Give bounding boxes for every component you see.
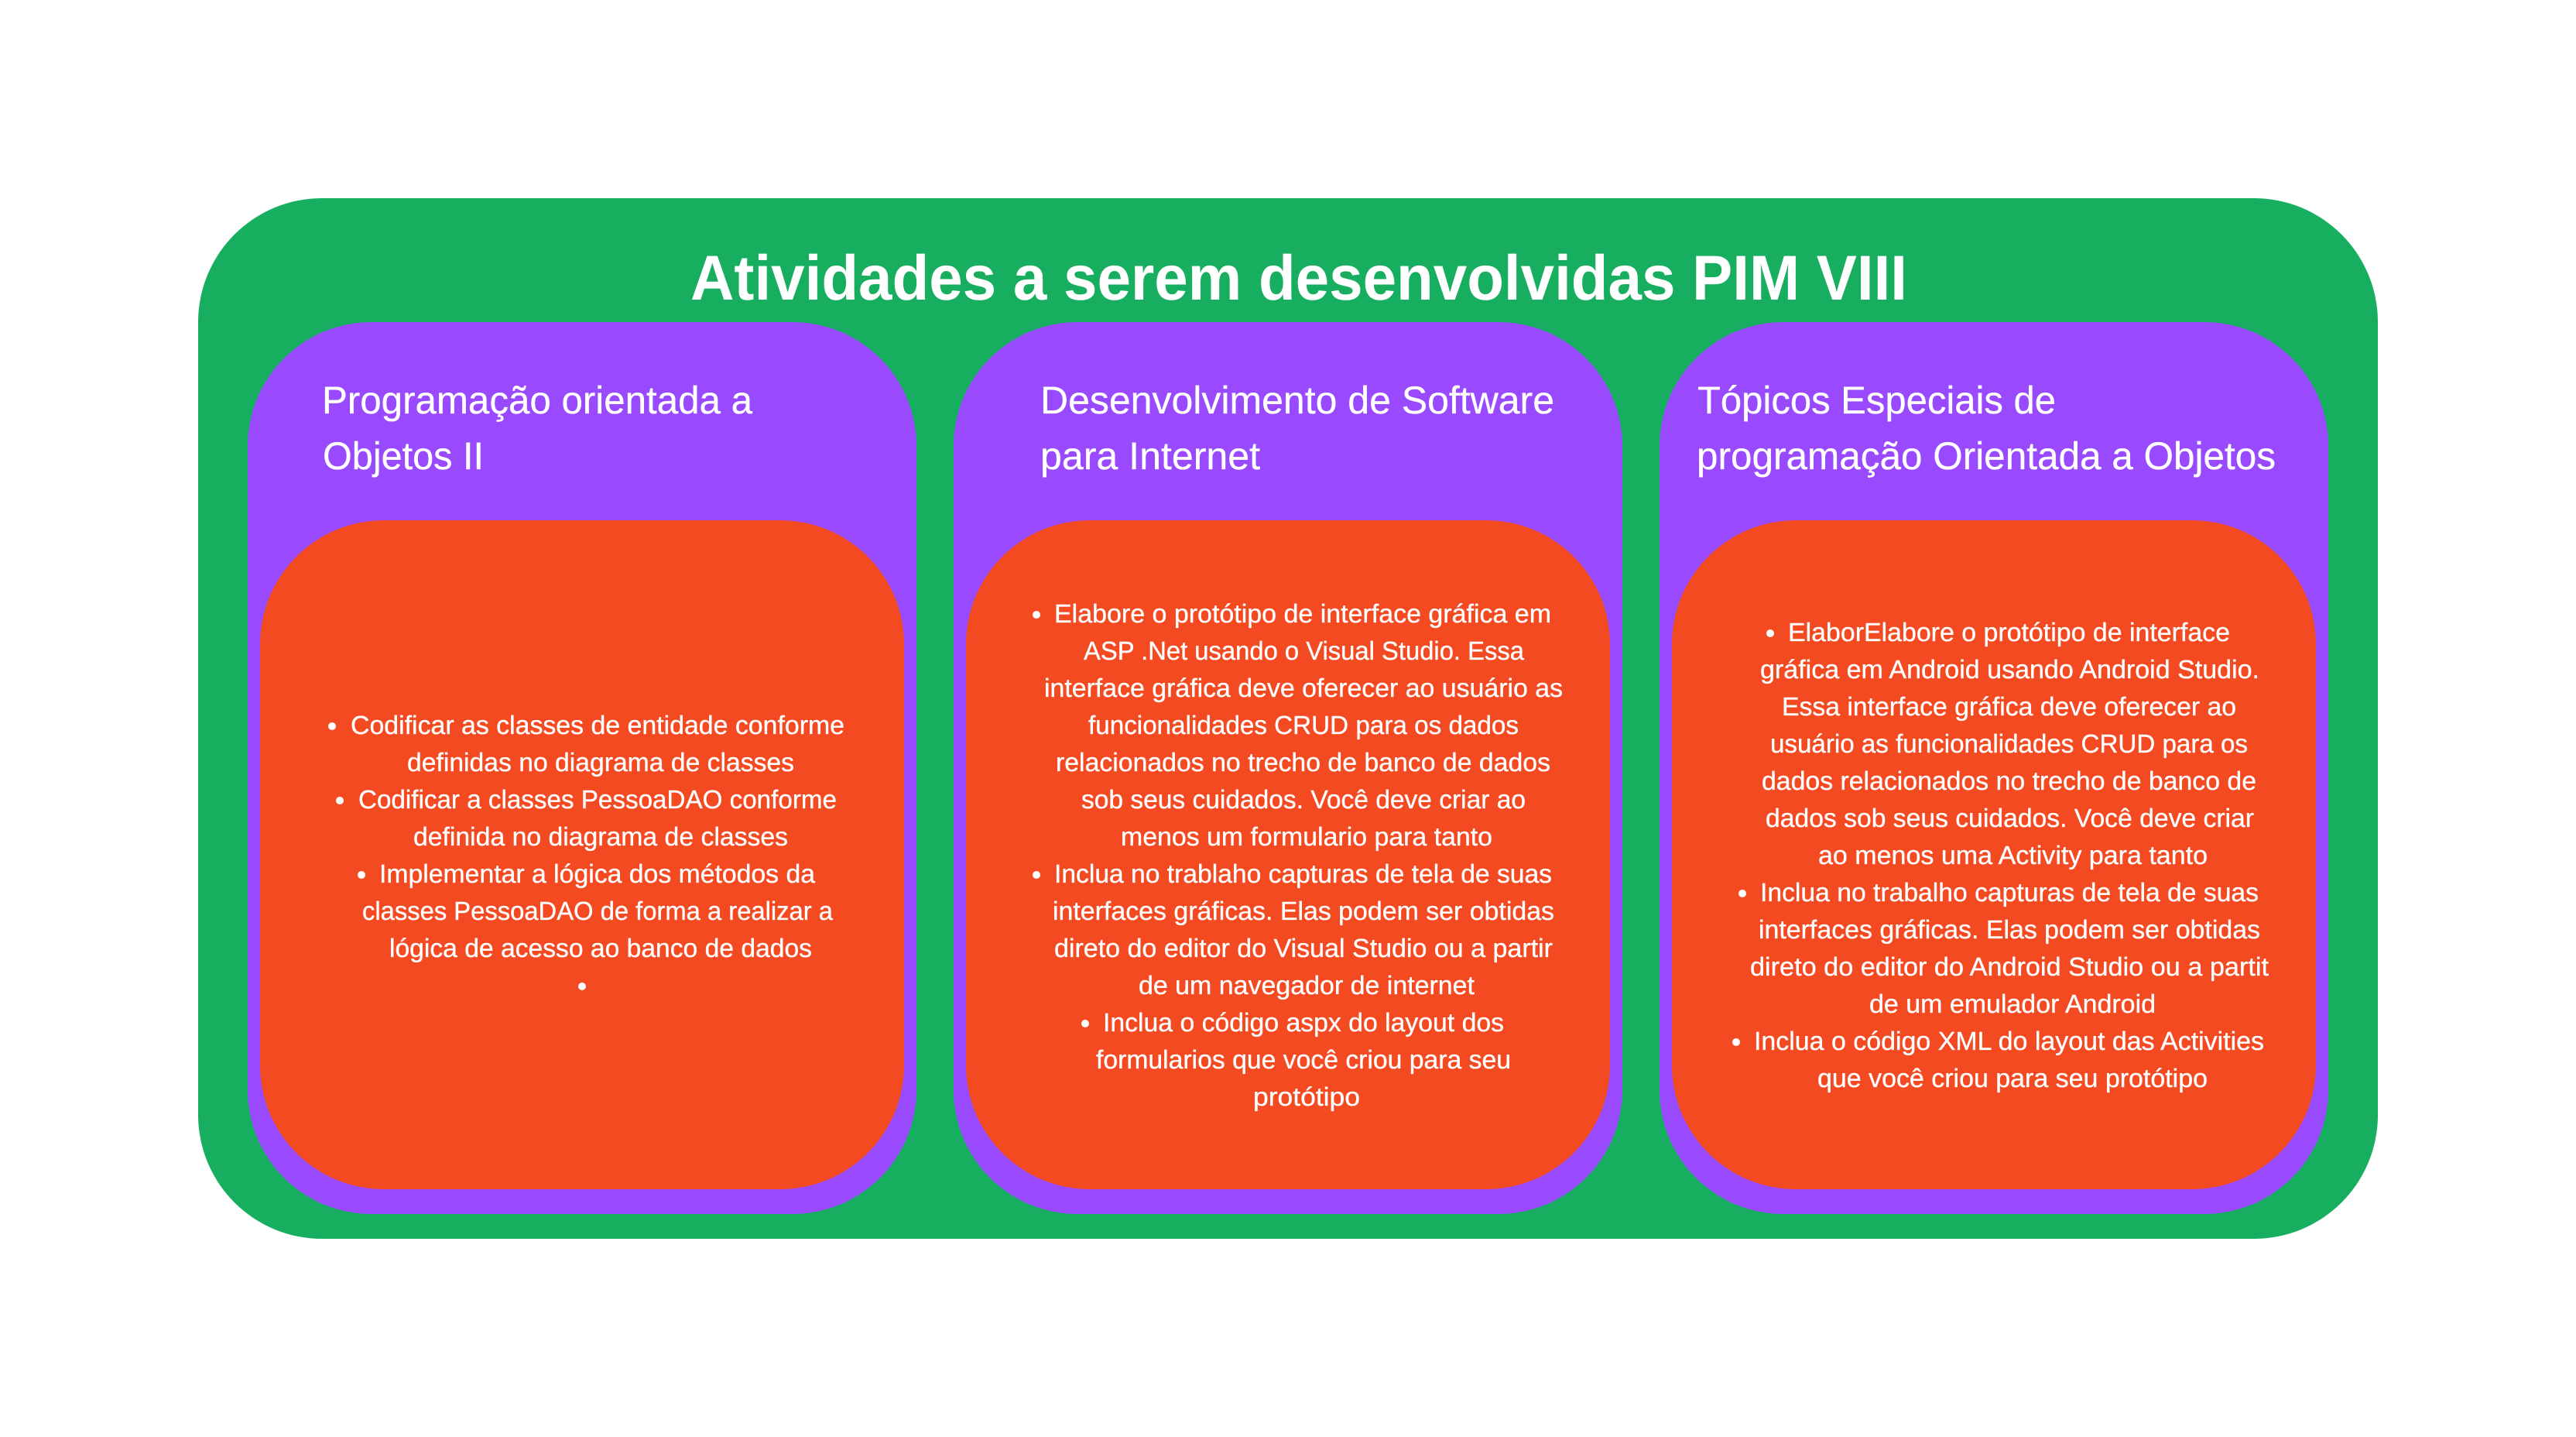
bullet: código aspx: formularios que você criou para seu — [1096, 1046, 1511, 1075]
bullet: capturas de tela: direto do editor do Android Studio ou a partit — [1750, 953, 2269, 982]
empty bullet — [578, 983, 586, 990]
bullet: capturas de tela: direto do editor do Visual Studio ou a partir — [1054, 935, 1553, 963]
bullet: código aspx — [1081, 1009, 1511, 1112]
bullet: protótipo Android: ElaborElabore o protótipo de interface — [1788, 619, 2230, 647]
bullet: protótipo ASP .Net: funcionalidades CRUD para os dados — [1088, 712, 1519, 740]
heading: Programação orientada a Objetos II: Programação orientada a — [322, 379, 752, 422]
bullet: codificar classes de entidade — [328, 712, 844, 777]
bullet list column 2 — [1033, 600, 1563, 1112]
heading: Desenvolvimento de Software para Internet: para Internet — [1040, 434, 1260, 478]
heading: Programação orientada a Objetos II: Objetos II — [323, 434, 484, 478]
bullet: capturas de tela: de um navegador de internet — [1139, 972, 1475, 1000]
bullet: protótipo ASP .Net: ASP .Net usando o Visual Studio. Essa — [1084, 637, 1524, 666]
bullet: codificar PessoaDAO: Codificar a classes PessoaDAO conforme — [358, 786, 837, 815]
bullet: protótipo Android: gráfica em Android usando Android Studio. — [1760, 656, 2259, 684]
heading: Tópicos Especiais de programação Orientada a Objetos — [1697, 379, 2276, 478]
orange card: activities column 3 — [1672, 520, 2316, 1189]
bullet: código aspx: Inclua o código aspx do layout dos — [1103, 1009, 1504, 1037]
bullet: protótipo Android: ao menos uma Activity para tanto — [1818, 842, 2208, 870]
bullet: código XML — [1732, 1027, 2264, 1093]
bullet: implementar lógica — [358, 860, 833, 963]
heading: Tópicos Especiais de programação Orientada a Objetos: programação Orientada a Objetos — [1697, 434, 2276, 478]
heading: Desenvolvimento de Software para Internet: Desenvolvimento de Software — [1040, 379, 1554, 422]
bullet: capturas de tela: interfaces gráficas. Elas podem ser obtidas — [1759, 916, 2260, 945]
bullet: protótipo Android: dados relacionados no trecho de banco de — [1762, 767, 2256, 796]
bullet: implementar lógica: classes PessoaDAO de forma a realizar a — [362, 897, 833, 926]
bullet: capturas de tela: de um emulador Android — [1869, 990, 2156, 1019]
bullet: protótipo ASP .Net: relacionados no trecho de banco de dados — [1056, 749, 1550, 777]
main green panel — [198, 198, 2378, 1239]
bullet: protótipo ASP .Net — [1033, 600, 1563, 852]
bullet list column 1 — [328, 712, 844, 990]
orange card: activities column 1 — [260, 520, 904, 1189]
bullet: código aspx: protótipo — [1253, 1083, 1360, 1112]
bullet: capturas de tela — [1033, 860, 1554, 1000]
bullet: código XML: Inclua o código XML do layout das Activities — [1754, 1027, 2264, 1056]
bullet: protótipo ASP .Net: interface gráfica deve oferecer ao usuário as — [1044, 674, 1563, 703]
bullet: protótipo ASP .Net: menos um formulario para tanto — [1121, 823, 1492, 852]
bullet list column 3 — [1732, 619, 2269, 1093]
title: Atividades a serem desenvolvidas PIM VIII — [690, 243, 1907, 314]
panel: Tópicos Especiais de programação Orientada a Objetos — [1660, 322, 2328, 1214]
bullet: capturas de tela: interfaces gráficas. Elas podem ser obtidas — [1053, 897, 1554, 926]
bullet: implementar lógica: Implementar a lógica dos métodos da — [379, 860, 815, 889]
bullet: codificar classes de entidade: Codificar as classes de entidade conforme — [351, 712, 844, 740]
bullet: protótipo Android — [1760, 619, 2259, 870]
panel: Programação orientada a Objetos II — [248, 322, 916, 1214]
bullet: protótipo Android: dados sob seus cuidados. Você deve criar — [1766, 804, 2254, 833]
bullet: implementar lógica: lógica de acesso ao banco de dados — [389, 935, 812, 963]
panel: Desenvolvimento de Software para Internet — [954, 322, 1622, 1214]
bullet: codificar PessoaDAO — [336, 786, 837, 852]
heading: Programação orientada a Objetos II — [322, 379, 752, 478]
heading: Desenvolvimento de Software para Internet — [1040, 379, 1554, 478]
bullet: capturas de tela — [1738, 879, 2269, 1019]
bullet: código XML: que você criou para seu protótipo — [1817, 1065, 2208, 1093]
orange card: activities column 2 — [966, 520, 1610, 1189]
bullet: protótipo ASP .Net: Elabore o protótipo de interface gráfica em — [1054, 600, 1551, 629]
heading: Tópicos Especiais de programação Orientada a Objetos: Tópicos Especiais de — [1697, 379, 2056, 422]
bullet: capturas de tela: Inclua no trablaho capturas de tela de suas — [1054, 860, 1552, 889]
bullet: protótipo Android: Essa interface gráfica deve oferecer ao — [1782, 693, 2236, 722]
bullet: protótipo Android: usuário as funcionalidades CRUD para os — [1770, 730, 2248, 759]
bullet: codificar PessoaDAO: definida no diagrama de classes — [413, 823, 788, 852]
bullet: codificar classes de entidade: definidas no diagrama de classes — [407, 749, 794, 777]
bullet: capturas de tela: Inclua no trabalho capturas de tela de suas — [1760, 879, 2259, 907]
bullet: protótipo ASP .Net: sob seus cuidados. Você deve criar ao — [1081, 786, 1526, 815]
